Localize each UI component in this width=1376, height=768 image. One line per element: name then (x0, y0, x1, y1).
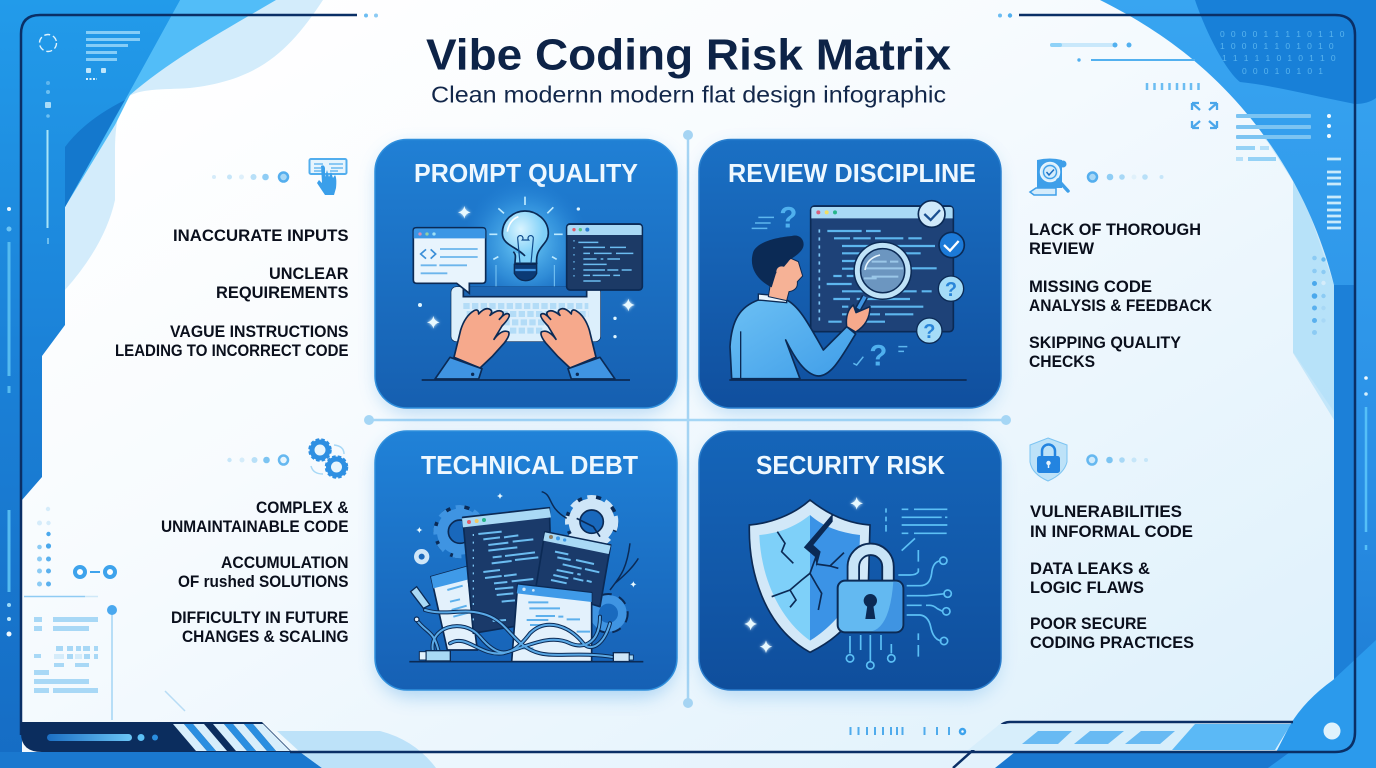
illustration: developer inspecting code: ? (779, 201, 797, 234)
list: technical debt risks: DIFFICULTY IN FUTURE (171, 608, 348, 627)
decorations top right: 1 1 1 1 1 0 1 0 1 1 0 (1222, 53, 1338, 63)
icon: gears (310, 440, 347, 478)
list: technical debt risks: COMPLEX & (256, 498, 348, 517)
panel: review discipline (699, 140, 1001, 414)
dots: security connector (1088, 456, 1148, 464)
list: prompt quality risks: LEADING TO INCORRECT CODE (115, 341, 348, 360)
list: review discipline risks: SKIPPING QUALITY (1029, 333, 1182, 352)
subtitle: Clean modernn modern flat design infographic (431, 82, 946, 108)
list: prompt quality risks: REQUIREMENTS (216, 283, 348, 302)
list: technical debt risks (161, 498, 348, 646)
illustration: developer inspecting code: ? (869, 339, 887, 372)
list: review discipline risks (1029, 220, 1213, 371)
list: security risks (1030, 502, 1194, 652)
list: technical debt risks: UNMAINTAINABLE CODE (161, 517, 348, 536)
panel: technical debt (375, 431, 677, 697)
list: review discipline risks: MISSING CODE (1029, 277, 1152, 296)
list: security risks: POOR SECURE (1030, 614, 1147, 633)
list: review discipline risks: ANALYSIS & FEEDBACK (1029, 296, 1213, 315)
list: security risks: DATA LEAKS & (1030, 559, 1150, 578)
footer bar left (21, 722, 292, 752)
illustration: developer inspecting code: ? (923, 321, 935, 343)
dots: review connector (1088, 172, 1164, 182)
list: review discipline risks: CHECKS (1029, 352, 1095, 371)
list: prompt quality risks: VAGUE INSTRUCTIONS (170, 322, 348, 341)
matrix axes (364, 130, 1011, 708)
list: review discipline risks: REVIEW (1029, 239, 1095, 258)
illustration: tangled code and cables (409, 492, 643, 662)
heading: prompt quality: PROMPT QUALITY (414, 158, 638, 188)
icon: review magnifier (1030, 158, 1068, 195)
list: review discipline risks: LACK OF THOROUGH (1029, 220, 1201, 239)
dots: technical connector (227, 456, 288, 464)
list: security risks: LOGIC FLAWS (1030, 578, 1144, 597)
decorations top right: 0 0 0 0 1 1 1 1 0 1 1 0 (1220, 29, 1346, 39)
footer bar right (968, 722, 1340, 750)
list: technical debt risks: OF rushed SOLUTIONS (178, 572, 348, 591)
illustration: laptop, bulb and hands (413, 180, 642, 380)
list: technical debt risks: ACCUMULATION (221, 553, 348, 572)
list: security risks: IN INFORMAL CODE (1030, 522, 1193, 541)
title: Vibe Coding Risk Matrix (426, 30, 952, 80)
decorations top right: 0 0 0 1 0 1 0 1 (1242, 66, 1325, 76)
decorations lower left (6, 507, 185, 720)
header ornaments (364, 13, 1012, 18)
heading: review discipline: REVIEW DISCIPLINE (728, 158, 976, 188)
heading: security risk: SECURITY RISK (756, 450, 945, 480)
decorations top left (6, 32, 140, 393)
list: security risks: CODING PRACTICES (1030, 633, 1194, 652)
heading: technical debt: TECHNICAL DEBT (421, 450, 638, 480)
list: technical debt risks: CHANGES & SCALING (182, 627, 348, 646)
illustration: developer inspecting code (729, 201, 967, 380)
list: prompt quality risks (115, 226, 348, 360)
list: prompt quality risks: INACCURATE INPUTS (173, 226, 348, 245)
panel: prompt quality (375, 140, 677, 414)
decorations top right: 1 0 0 0 1 1 0 1 0 1 0 (1220, 41, 1336, 51)
illustration: developer inspecting code: ? (945, 279, 957, 301)
decorations top right (1050, 29, 1346, 228)
dots: prompt connector (212, 172, 288, 182)
bottom ticks (850, 727, 965, 735)
decorations right side (1312, 256, 1368, 550)
list: prompt quality risks: UNCLEAR (269, 264, 348, 283)
panel: security risk (699, 431, 1001, 697)
icon: prompt input hand (310, 159, 346, 195)
list: security risks: VULNERABILITIES (1030, 502, 1182, 521)
illustration: cracked shield and padlock (744, 497, 951, 669)
icon: shield with lock (1030, 438, 1067, 481)
